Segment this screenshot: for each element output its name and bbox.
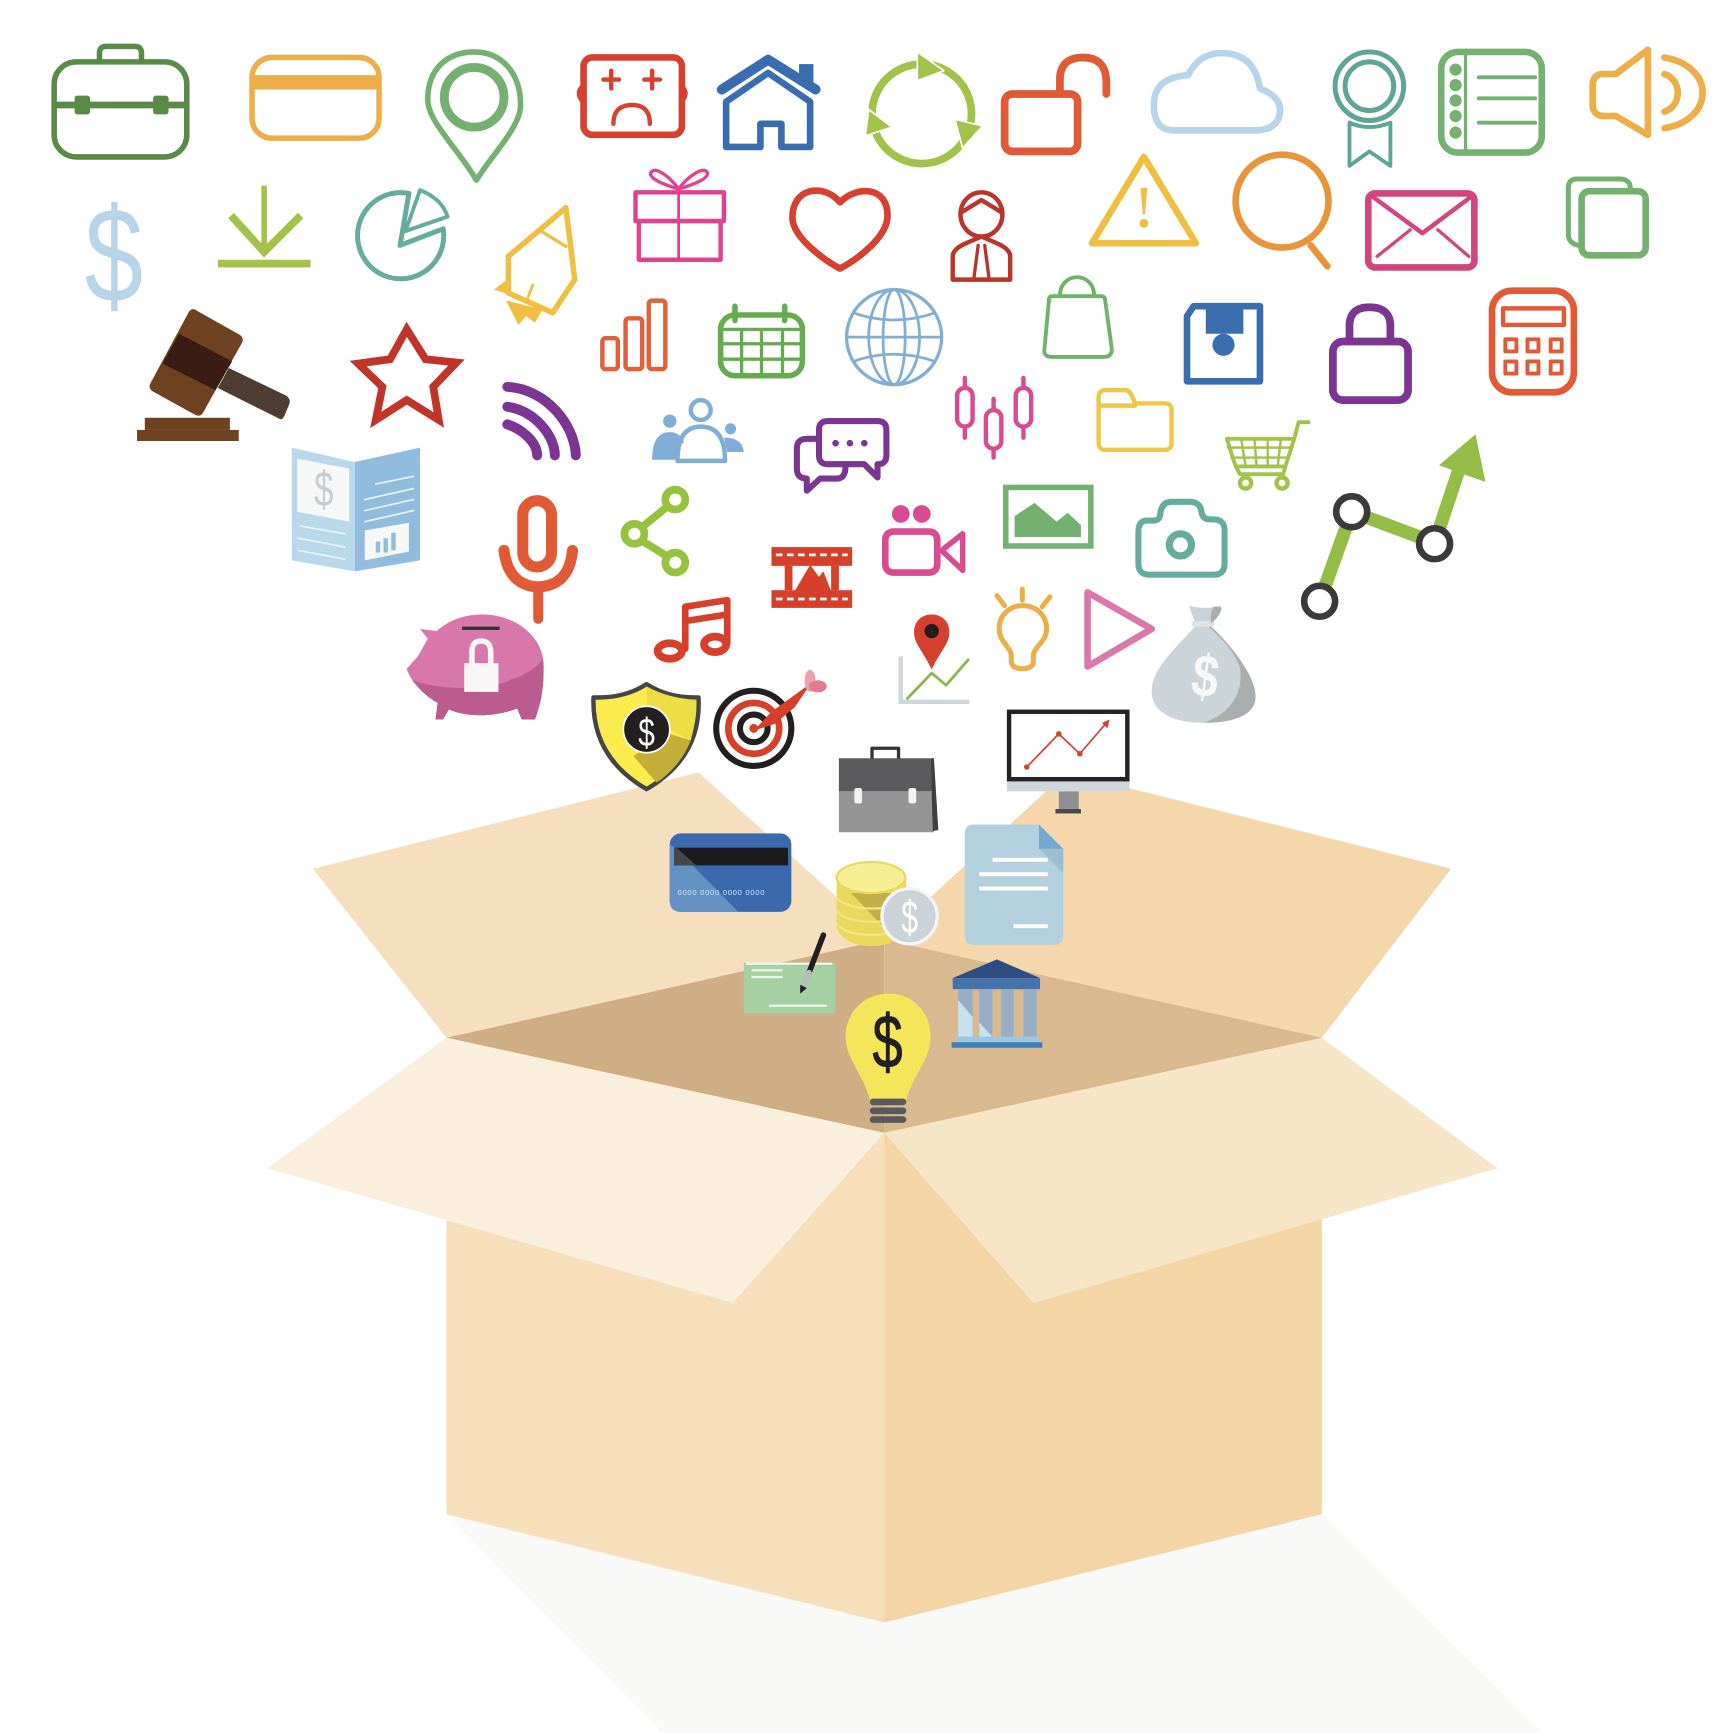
- icon: blue bank card: [670, 833, 791, 912]
- back right flap: [884, 773, 1451, 1038]
- icon: blue bank card: 0000 0000 0000 0000: [678, 888, 765, 897]
- icon: stack of coins: [837, 862, 937, 946]
- icon: bank building: [952, 959, 1042, 1048]
- icon: light bulb outline: [997, 589, 1050, 669]
- box interior left: [447, 939, 884, 1133]
- icon: dollar light bulb: $: [872, 1000, 903, 1084]
- icon: financial report booklet: [292, 448, 420, 571]
- icon: warning triangle: [1092, 157, 1196, 243]
- icon: copy pages: [1568, 179, 1646, 255]
- icon: purple padlock: [1333, 307, 1408, 400]
- icon: dollar sign: $: [85, 180, 143, 331]
- icon: picture frame: [1006, 487, 1091, 546]
- icon: magnifier: [1236, 155, 1328, 266]
- icon: award ribbon: [1335, 52, 1404, 166]
- icon: calendar: [721, 306, 802, 376]
- icon: share nodes: [624, 490, 685, 573]
- icon: play triangle: [1088, 592, 1152, 666]
- icon: green briefcase outline: [54, 46, 187, 157]
- open cardboard box: [267, 773, 1542, 1733]
- box right face: [884, 1038, 1322, 1622]
- icon: camera: [1138, 502, 1225, 575]
- icon: star: [358, 329, 456, 420]
- icon: cloud: [1154, 53, 1280, 130]
- icon: sad face: [579, 57, 686, 135]
- icon: notebook: [1441, 52, 1542, 153]
- icon: shield with dollar: $: [638, 711, 655, 755]
- icon: target with dart: [716, 670, 827, 766]
- icon: stack of coins: $: [901, 892, 918, 943]
- icon: video camera: [885, 505, 963, 573]
- icon: dollar light bulb: [846, 994, 931, 1123]
- front left flap: [267, 1038, 884, 1303]
- icon: heart: [792, 191, 887, 269]
- icon: piggy bank with lock: [407, 615, 544, 720]
- icon: green location pin: [428, 52, 521, 180]
- icon: pie chart: [358, 190, 448, 279]
- box left face: [447, 1038, 884, 1622]
- icon: shield with dollar: [593, 684, 699, 789]
- icon: shopping bag: [1044, 277, 1112, 357]
- box interior right: [884, 939, 1322, 1133]
- icon: music note: [658, 600, 727, 659]
- icon: monitor with chart: [1007, 712, 1130, 813]
- icon: chat bubbles: [797, 421, 886, 491]
- icon: person in suit: [953, 192, 1010, 280]
- icon: download arrow: [218, 186, 311, 267]
- box floor shadow: [447, 1514, 1542, 1733]
- icon: microphone: [504, 501, 573, 619]
- icon: cheque and pen: [744, 935, 836, 1013]
- icon: group of people: [652, 400, 744, 461]
- icon: gray briefcase: [839, 748, 938, 832]
- icon: candlestick chart: [957, 378, 1031, 458]
- icon: calculator: [1492, 291, 1574, 392]
- icon: envelope: [1368, 193, 1474, 267]
- icon: open padlock: [1005, 57, 1106, 151]
- front right flap: [884, 1038, 1498, 1303]
- icon: rising line arrow: [1304, 434, 1485, 617]
- icon: recycle arrows: [865, 52, 983, 164]
- icon: globe: [847, 290, 942, 385]
- icon: wifi signal: [507, 387, 576, 455]
- icon: money bag: [1152, 606, 1256, 723]
- icon: rocket: [494, 208, 575, 325]
- icon: map pin on chart: [901, 615, 969, 702]
- icon: orange card outline: [252, 57, 379, 138]
- icon: speaker: [1593, 50, 1703, 135]
- icon: financial report booklet: $: [314, 462, 334, 518]
- back left flap: [313, 773, 884, 1038]
- icon: money bag: $: [1187, 642, 1223, 711]
- icon: gift box: [636, 170, 724, 260]
- icon: gavel: [137, 309, 290, 441]
- icon: shopping cart: [1227, 422, 1309, 489]
- icon: folder: [1099, 390, 1172, 450]
- icon: document: [965, 825, 1063, 945]
- icon: bar chart: [602, 301, 665, 369]
- icon: film strip: [771, 547, 852, 608]
- icon: blue house: [722, 60, 816, 147]
- icon: floppy disk: [1187, 304, 1260, 381]
